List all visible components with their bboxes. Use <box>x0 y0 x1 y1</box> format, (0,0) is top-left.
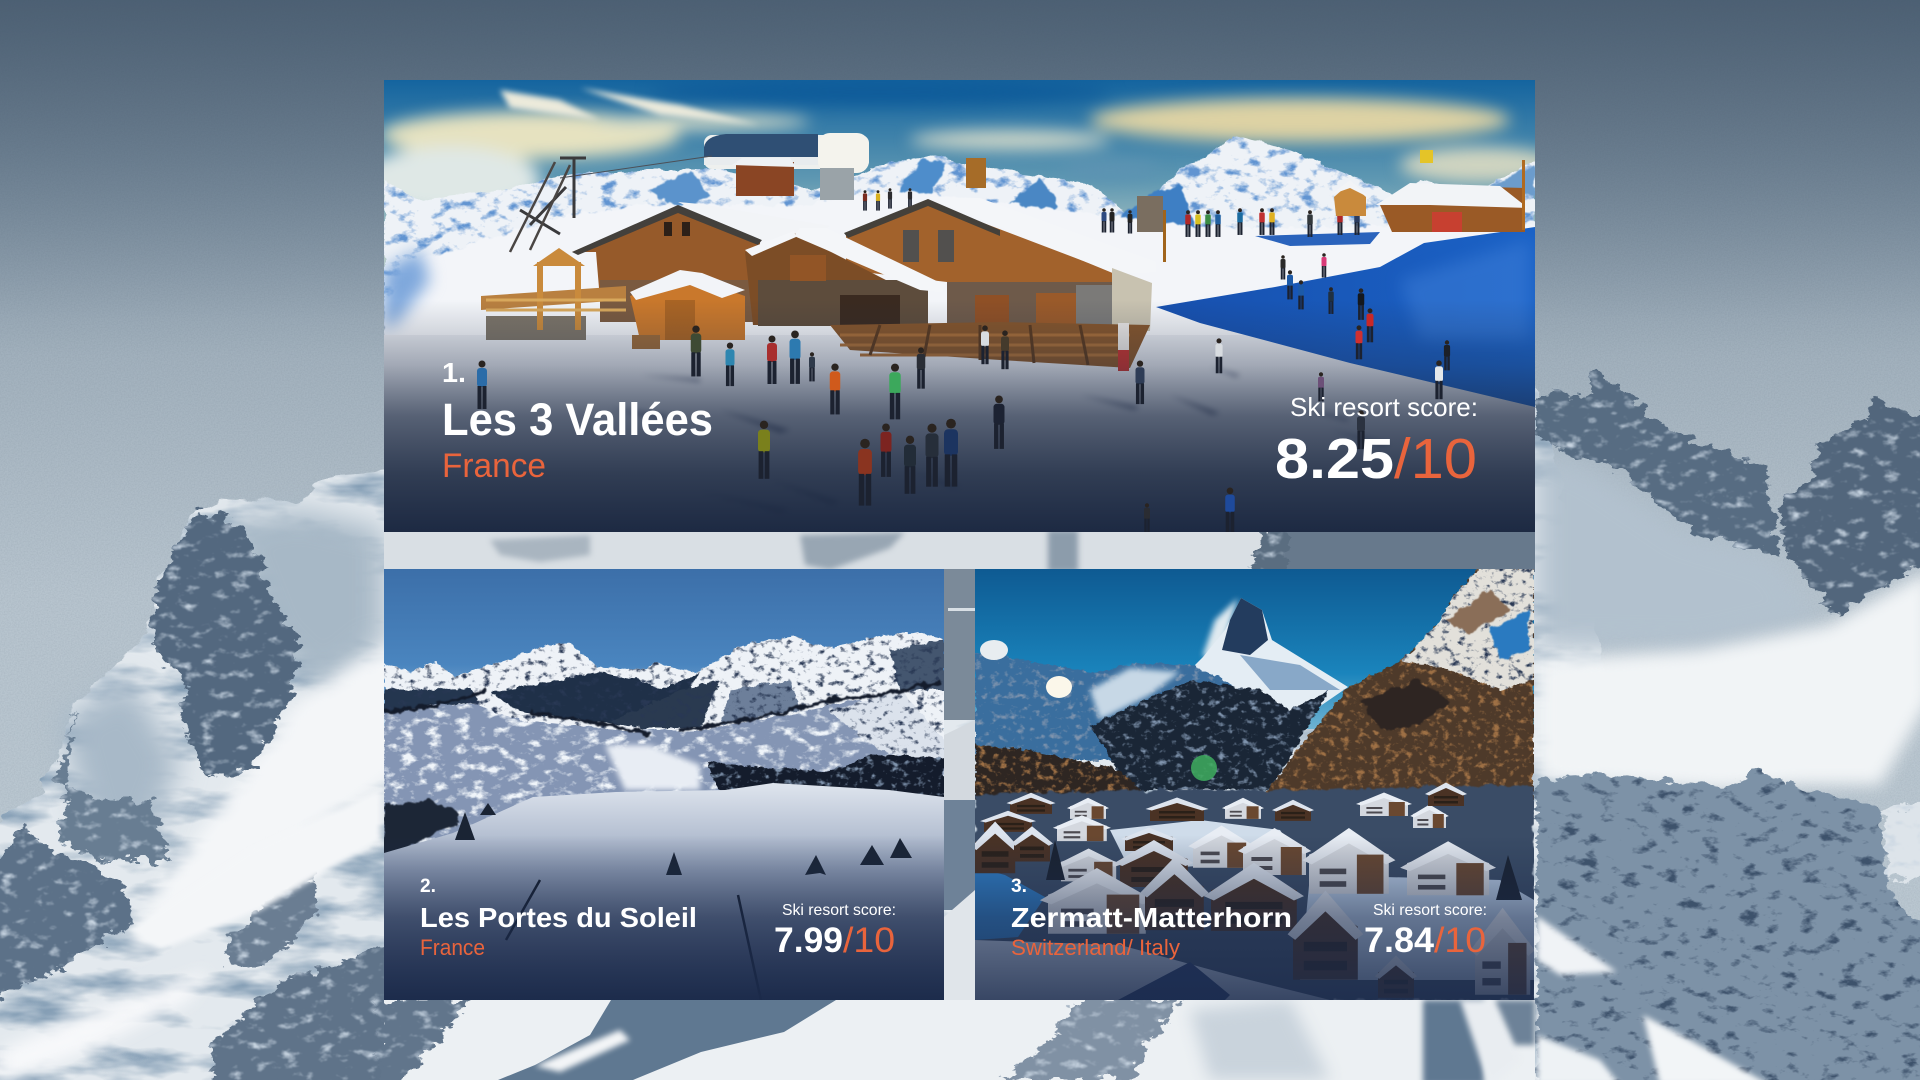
country: France: France <box>420 935 485 960</box>
photo: Matterhorn above Zermatt village <box>972 569 1535 1000</box>
score 7.99/10: /10 <box>843 921 895 960</box>
photo: snowy ridgeline under blue sky <box>384 569 944 1005</box>
panel 3: Zermatt-Matterhorn <box>972 569 1535 1000</box>
far mountains <box>384 135 1535 300</box>
snow shadows <box>626 368 1382 446</box>
snow and rock below the panels <box>380 1000 1535 1080</box>
score 7.84/10: /10 <box>1434 921 1486 960</box>
panel 2: Les Portes du Soleil <box>384 569 944 1005</box>
terrace tables <box>632 322 1150 371</box>
snow visible above the lower panels <box>384 530 1535 572</box>
name: Zermatt-Matterhorn: Zermatt-Matterhorn <box>1011 902 1292 933</box>
score 8.25/10: 8.25 <box>1275 427 1394 491</box>
score 8.25/10 <box>1275 427 1477 491</box>
rank 3: 3. <box>1011 876 1027 897</box>
name: Les 3 Vallées: Les 3 Vallées <box>442 394 713 445</box>
strip between the lower panels <box>944 569 975 1005</box>
crowd on upper ridge <box>863 188 1360 237</box>
right mountain <box>1537 371 1920 1080</box>
snow slopes <box>384 189 1527 335</box>
rank 2: 2. <box>420 876 436 897</box>
panel 1: Les 3 Vallées <box>360 78 1560 535</box>
lift station <box>510 133 869 252</box>
left mountain <box>0 390 1600 1080</box>
chalets <box>481 150 1528 340</box>
score 7.84/10 <box>1364 921 1486 960</box>
name: Les Portes du Soleil: Les Portes du Soleil <box>420 902 697 933</box>
score 8.25/10: /10 <box>1394 427 1477 491</box>
score label: Ski resort score: <box>782 902 896 919</box>
score 7.84/10: 7.84 <box>1364 921 1435 960</box>
country: Switzerland/ Italy: Switzerland/ Italy <box>1011 935 1180 960</box>
skiers <box>477 253 1450 534</box>
photo: alpine chalet and skiers <box>360 78 1560 535</box>
score label: Ski resort score: <box>1290 392 1478 422</box>
score 7.99/10: 7.99 <box>774 921 843 960</box>
rank 1: 1. <box>442 357 466 388</box>
village <box>972 782 1535 1000</box>
score label: Ski resort score: <box>1373 902 1487 919</box>
country: France: France <box>442 447 546 485</box>
score 7.99/10 <box>774 921 895 960</box>
